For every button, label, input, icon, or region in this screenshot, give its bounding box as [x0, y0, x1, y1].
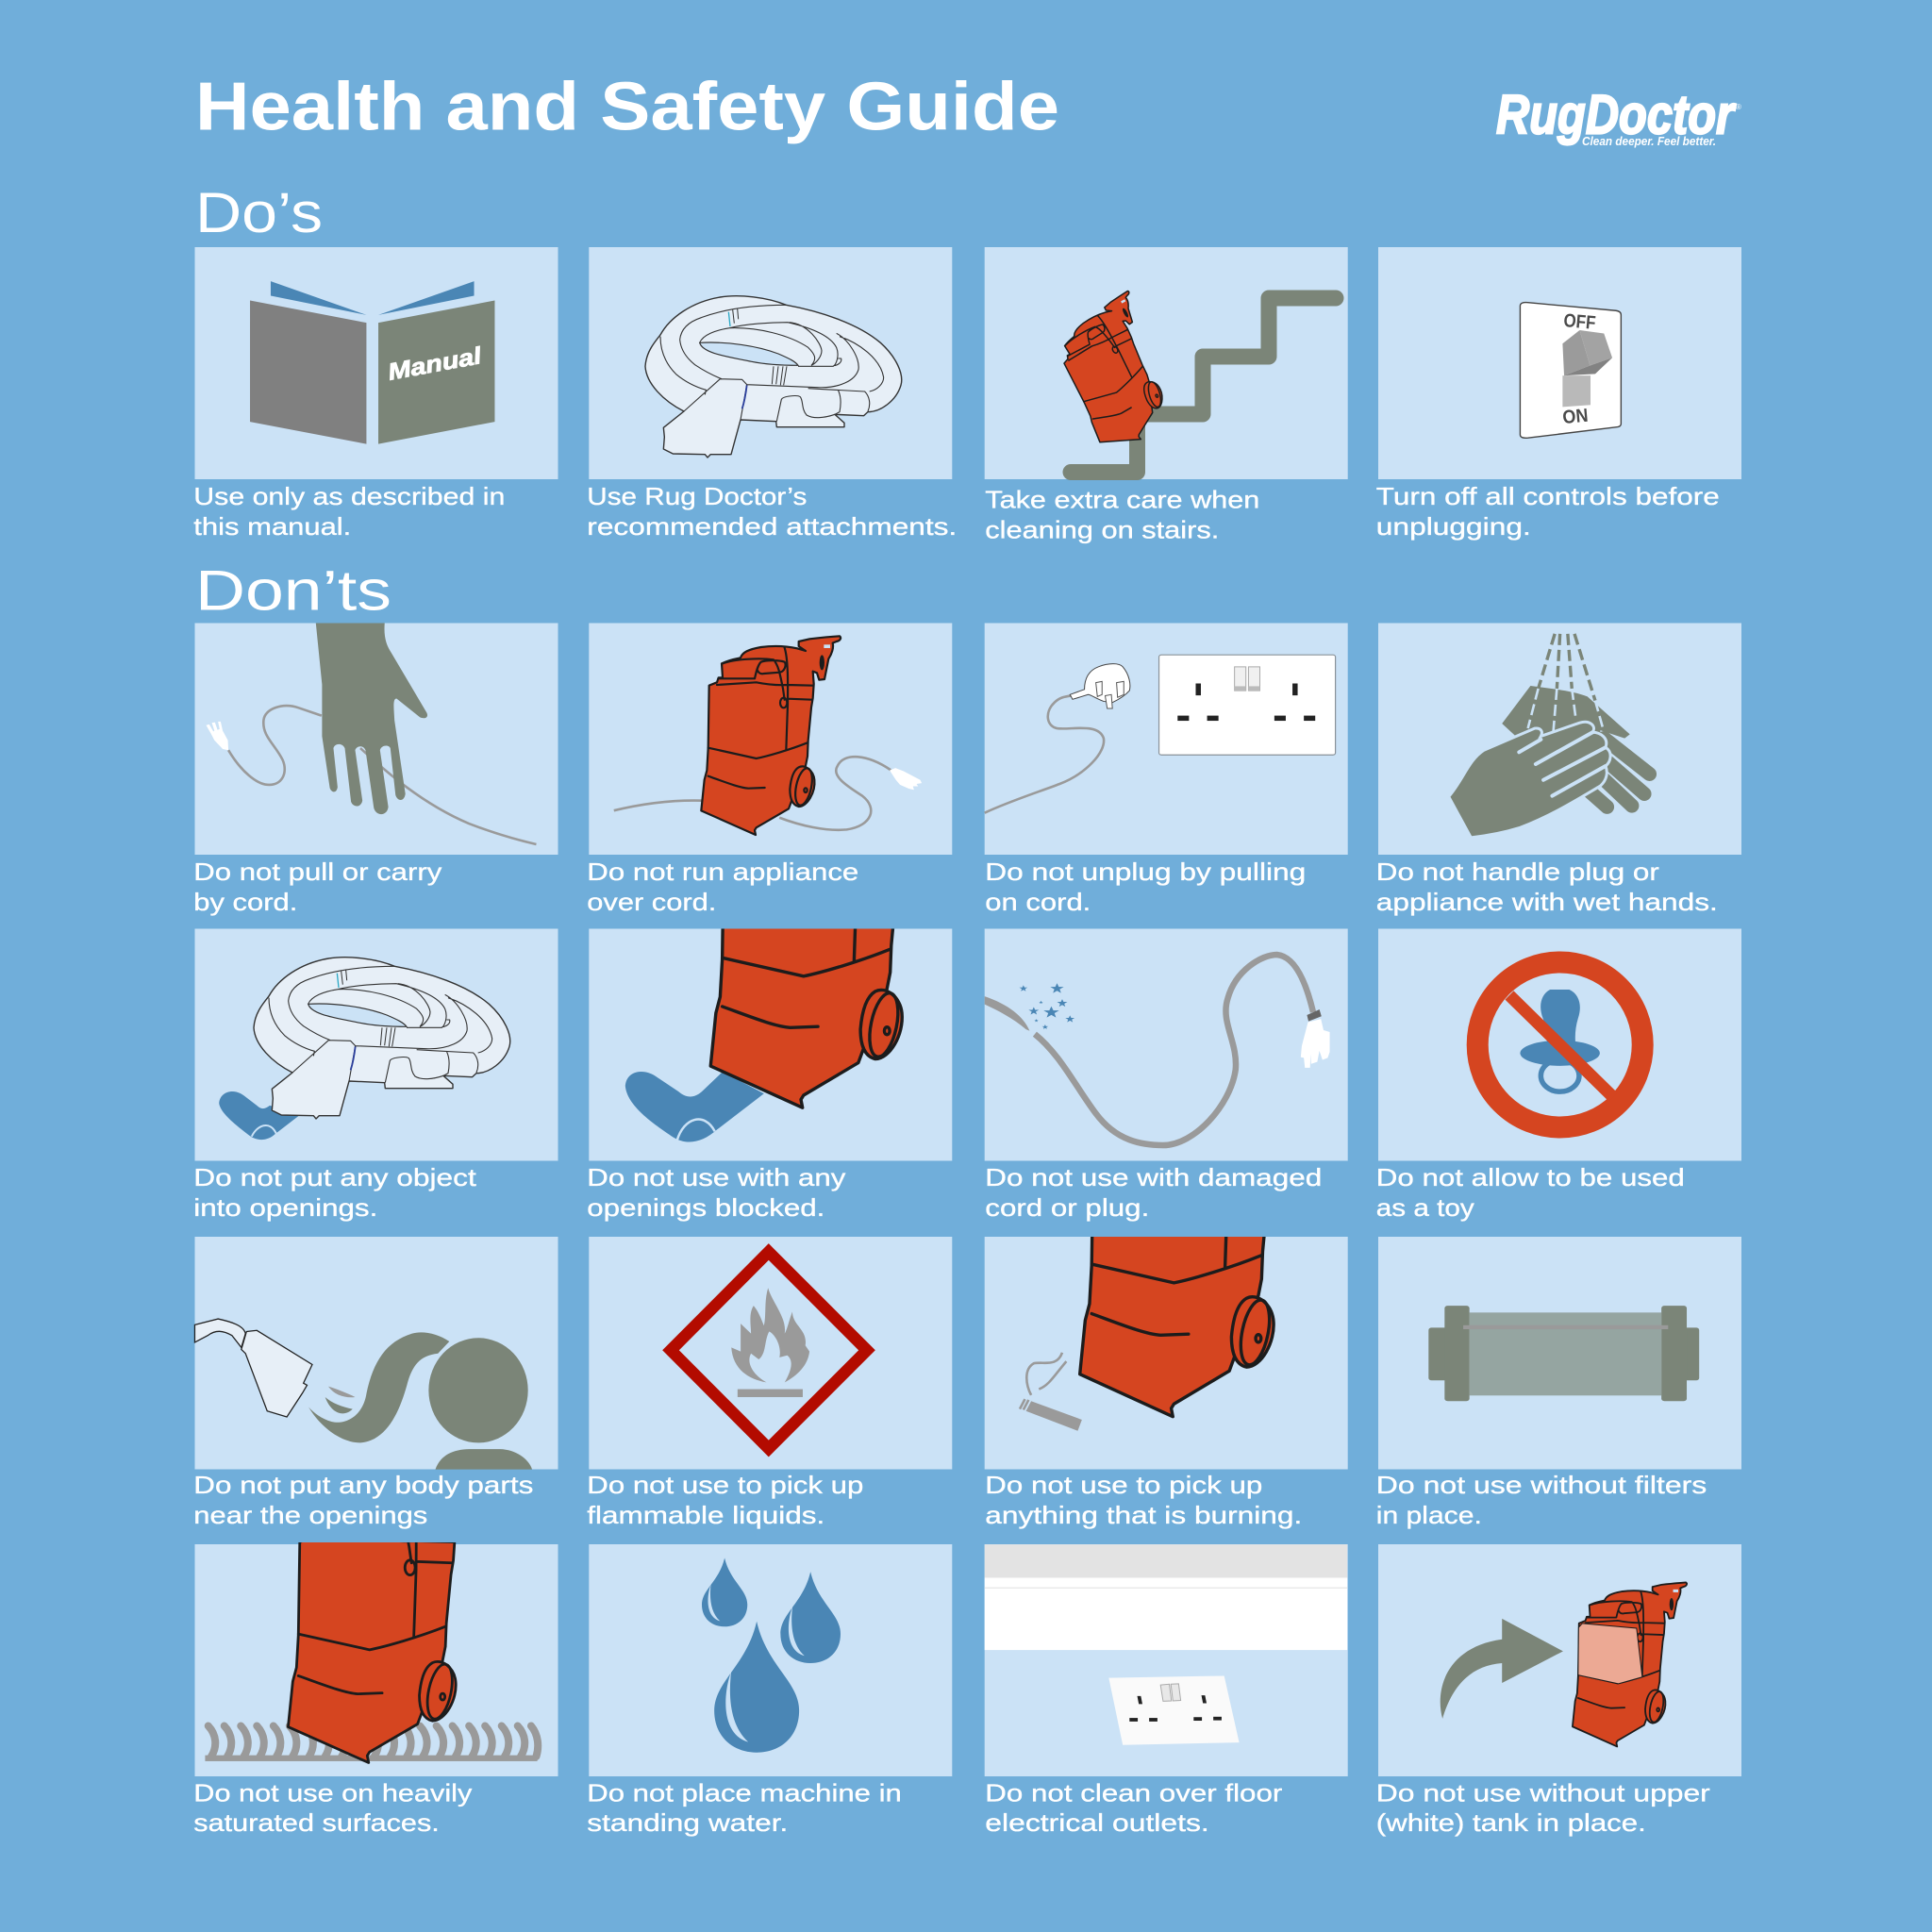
- caption: near the openings: [193, 1501, 427, 1529]
- caption: by cord.: [193, 888, 297, 916]
- icon: machine on cord: [614, 636, 922, 835]
- icon: open manual: Manual: [386, 342, 485, 386]
- caption: [587, 858, 858, 916]
- caption: standing water.: [587, 1808, 788, 1837]
- caption: as a toy: [1376, 1193, 1474, 1222]
- caption: in place.: [1376, 1501, 1482, 1529]
- icon: hose and attachment: [645, 296, 902, 458]
- caption: recommended attachments.: [587, 512, 957, 541]
- icon: carpet: [205, 1725, 538, 1761]
- panel background: [985, 1544, 1348, 1776]
- caption: [1376, 1778, 1710, 1837]
- icon: damaged cord and plug: [985, 955, 1330, 1145]
- caption: Do not use on heavily: [193, 1778, 472, 1807]
- caption: Do not use to pick up: [985, 1471, 1262, 1499]
- icon: on/off switch: ON: [1562, 406, 1589, 428]
- title: Health and Safety Guide: [195, 70, 1059, 145]
- panel background: [194, 928, 558, 1160]
- icon: tilted machine: [1043, 291, 1192, 457]
- caption: Do not clean over floor: [985, 1778, 1283, 1807]
- caption: [193, 1778, 472, 1837]
- caption: Do not allow to be used: [1376, 1163, 1685, 1191]
- caption: [985, 1778, 1283, 1837]
- icon: flammable hazard diamond: [671, 1252, 867, 1449]
- panel background: [985, 247, 1348, 479]
- caption: unplugging.: [1376, 512, 1531, 541]
- panel: do not block openings: [588, 928, 953, 1222]
- panel: body parts near openings: [193, 1237, 558, 1529]
- caption: appliance with wet hands.: [1376, 888, 1718, 916]
- panel: do not unplug by cord: [985, 623, 1348, 916]
- icon: machine close-up: [1078, 1237, 1275, 1419]
- caption: on cord.: [985, 888, 1091, 916]
- caption: electrical outlets.: [985, 1808, 1209, 1837]
- caption: flammable liquids.: [587, 1501, 824, 1529]
- caption: Do not place machine in: [587, 1778, 902, 1807]
- icon: pacifier: [1520, 990, 1600, 1091]
- caption: Do not use to pick up: [587, 1471, 863, 1499]
- panel background: [589, 1544, 952, 1776]
- icon: nozzle and person with hair pulled: [194, 1319, 532, 1470]
- caption: Do not use with damaged: [985, 1163, 1322, 1191]
- panel background: [985, 623, 1348, 855]
- panel background: [589, 1237, 952, 1470]
- caption: [587, 482, 957, 541]
- panel: saturated surfaces: [194, 1542, 558, 1832]
- caption: over cord.: [587, 888, 716, 916]
- caption: Do not run appliance: [587, 858, 858, 886]
- panel: turn off controls: [1376, 247, 1741, 541]
- panel: floor electrical outlets: [985, 1544, 1348, 1837]
- panel background: [1378, 928, 1741, 1160]
- panel: do not allow as a toy: [1376, 928, 1741, 1222]
- panel background: [194, 1544, 558, 1776]
- panel: anything burning: [985, 1237, 1348, 1529]
- caption: Do not put any body parts: [193, 1471, 533, 1499]
- caption: [193, 482, 505, 541]
- panel background: [1378, 623, 1741, 855]
- caption: Do not pull or carry: [193, 858, 441, 886]
- icon: on/off switch: OFF: [1563, 310, 1596, 334]
- panel background: [589, 247, 952, 479]
- panel background: [1378, 1544, 1741, 1776]
- logo: Rug Doctor: Clean deeper. Feel better.: [1582, 134, 1716, 148]
- panel: filters in place: [1376, 1237, 1741, 1529]
- panel background: [1378, 1237, 1741, 1470]
- icon: stairs: [1071, 298, 1336, 472]
- caption: [1376, 482, 1720, 541]
- caption: [985, 1471, 1302, 1529]
- panel: recommended attachments: [587, 247, 957, 541]
- icon: skirting wall and floor socket: [985, 1544, 1347, 1745]
- caption: Take extra care when: [985, 486, 1259, 514]
- panel: do not put objects into openings: [193, 928, 558, 1222]
- icon: hose blocking opening: [254, 958, 510, 1119]
- heading: Don'ts: Don’ts: [195, 558, 391, 623]
- caption: (white) tank in place.: [1376, 1808, 1646, 1837]
- caption: into openings.: [193, 1193, 377, 1222]
- caption: saturated surfaces.: [193, 1808, 440, 1837]
- caption: Use Rug Doctor’s: [587, 482, 807, 510]
- panel background: [589, 623, 952, 855]
- arrow: [1441, 1619, 1563, 1719]
- panel background: [985, 928, 1348, 1160]
- icon: filter cylinder: [1428, 1306, 1699, 1401]
- panel background: [194, 247, 558, 479]
- heading: Do's: Do’s: [195, 181, 323, 244]
- caption: Do not use without filters: [1376, 1471, 1707, 1499]
- icon: water drops: [702, 1557, 841, 1753]
- panel: use only as described in manual: [193, 247, 558, 541]
- caption: this manual.: [193, 512, 351, 541]
- panel background: [194, 623, 558, 855]
- icon: hand and cord: [207, 624, 536, 844]
- icon: machine close-up: [287, 1542, 458, 1764]
- caption: [193, 1471, 533, 1529]
- caption: cord or plug.: [985, 1193, 1149, 1222]
- icon: machine close-up: [709, 928, 904, 1109]
- caption: [1376, 1471, 1707, 1529]
- caption: [193, 1163, 477, 1222]
- caption: cleaning on stairs.: [985, 516, 1219, 544]
- panel: standing water: [587, 1544, 952, 1837]
- panel: do not pull by cord: [193, 623, 558, 916]
- icon: plug, cord and wall socket: [985, 655, 1336, 813]
- caption: [587, 1471, 863, 1529]
- caption: anything that is burning.: [985, 1501, 1302, 1529]
- icon: prohibition sign: [1477, 962, 1642, 1127]
- icon: wet hands: [1449, 634, 1650, 838]
- panel: do not use with damaged cord: [985, 928, 1348, 1222]
- panel: extra care on stairs: [985, 247, 1348, 544]
- panel background: [1378, 247, 1741, 479]
- logo: Rug Doctor: ®: [1736, 103, 1741, 111]
- icon: sock foot: [219, 1091, 301, 1140]
- icon: cigarette with smoke: [1020, 1353, 1082, 1431]
- panel: do not run over cord: [587, 623, 952, 916]
- caption: [985, 858, 1306, 916]
- panel: flammable liquids: [587, 1237, 952, 1529]
- logo: Rug Doctor: RugDoctor: [1496, 85, 1737, 145]
- icon: open manual: [250, 281, 494, 444]
- caption: openings blocked.: [587, 1193, 824, 1222]
- panel background: [589, 928, 952, 1160]
- panel background: [194, 1237, 558, 1470]
- caption: [587, 1163, 845, 1222]
- panel background: [985, 1237, 1348, 1470]
- icon: sock foot: [625, 1072, 764, 1142]
- caption: [1376, 858, 1718, 916]
- caption: Do not unplug by pulling: [985, 858, 1306, 886]
- caption: Use only as described in: [193, 482, 505, 510]
- caption: [985, 1163, 1322, 1222]
- caption: [1376, 1163, 1685, 1222]
- panel: upper tank in place: [1376, 1544, 1741, 1837]
- icon: machine with missing tank: [1573, 1582, 1687, 1746]
- caption: Do not put any object: [193, 1163, 477, 1191]
- caption: [985, 486, 1259, 544]
- caption: Do not handle plug or: [1376, 858, 1659, 886]
- caption: [193, 858, 441, 916]
- caption: Do not use without upper: [1376, 1778, 1710, 1807]
- caption: [587, 1778, 902, 1837]
- caption: Turn off all controls before: [1376, 482, 1720, 510]
- caption: Do not use with any: [587, 1163, 845, 1191]
- icon: on/off switch: [1520, 303, 1621, 438]
- panel: do not handle with wet hands: [1376, 623, 1741, 916]
